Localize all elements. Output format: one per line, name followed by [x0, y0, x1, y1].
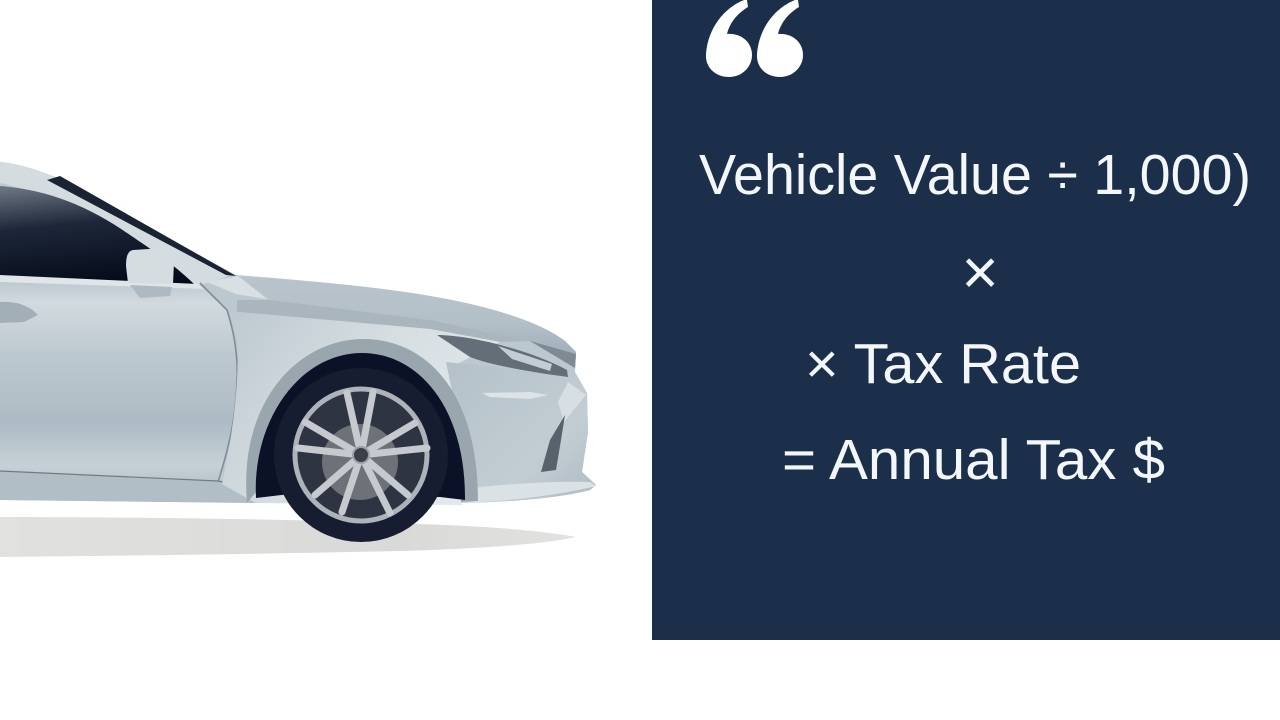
car body [0, 162, 596, 503]
rocker line [0, 471, 254, 488]
panel background [652, 0, 1280, 640]
rim [295, 389, 427, 521]
lower lip [463, 482, 596, 503]
window sill [0, 275, 204, 289]
front fender [222, 311, 500, 505]
headlight detail [498, 346, 552, 371]
door handle [0, 302, 38, 323]
bumper highlight [482, 392, 548, 399]
car illustration [0, 162, 596, 557]
front wheel [274, 368, 448, 542]
wheel arch trim [246, 339, 478, 503]
formula line 4: = Annual Tax $ [782, 428, 1165, 492]
icon: quotation mark [706, 0, 803, 77]
wheel well [256, 353, 465, 500]
side mirror [126, 248, 174, 284]
formula line 2: × [961, 236, 999, 308]
door panel [0, 283, 237, 482]
windshield base [207, 276, 267, 299]
tire [274, 368, 448, 542]
bumper edge highlight [558, 382, 586, 422]
spokes [298, 392, 427, 513]
formula line 3: × Tax Rate [805, 332, 1081, 396]
hood [241, 277, 576, 368]
dark roof trim [47, 176, 236, 276]
front bumper [446, 362, 596, 503]
fender top band [237, 300, 530, 342]
side window [0, 186, 195, 285]
hub [353, 447, 369, 463]
bumper intake [541, 415, 565, 472]
panel: formula [652, 0, 1280, 640]
door seam [200, 283, 237, 482]
brake disc [322, 424, 398, 500]
headlight [437, 335, 568, 377]
hood edge [530, 341, 576, 368]
formula line 1: Vehicle Value ÷ 1,000) [699, 143, 1251, 207]
ground shadow [0, 517, 576, 557]
mirror shadow [130, 285, 172, 298]
roof pillar [0, 162, 232, 286]
rocker panel [0, 471, 256, 503]
